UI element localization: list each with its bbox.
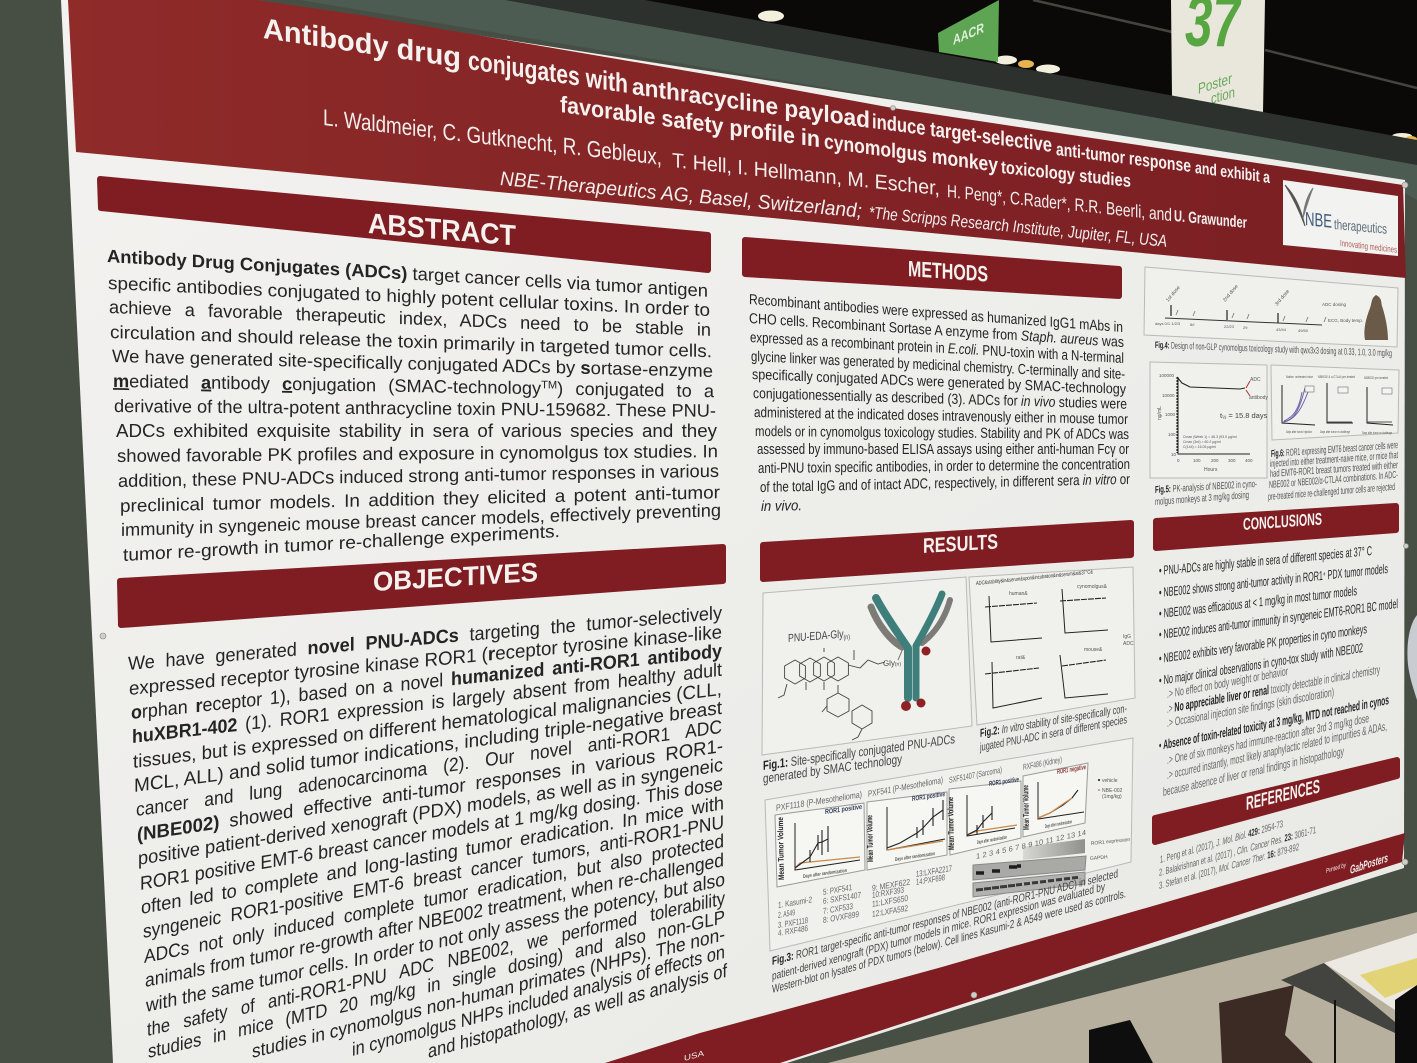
footer contact text: USA: [684, 1049, 705, 1063]
title: conjugates with: [468, 45, 628, 99]
abstract text: specific antibodies conjugated to highly potent cellular toxins. In order to: [108, 273, 710, 320]
figure 5: PK analysis chart: ng/mL: [1157, 406, 1163, 420]
sample list: 9: MEXF622: [872, 877, 910, 893]
abstract text: preclinical tumor models. In addition they elicited a potent anti-tumor: [120, 482, 720, 516]
heading bar: conclusions: [1156, 506, 1396, 548]
chart: naive mice: Days after tumor injection: [1286, 430, 1312, 434]
chart: PXF541: [865, 775, 947, 870]
timeline axis: [1165, 318, 1322, 325]
objectives text: tissues, but is expressed on different hematological malignancies (CLL,: [133, 679, 722, 773]
icon: monkey: [1364, 295, 1388, 340]
timeline day labels: days 0/1 1/2/3: [1155, 321, 1181, 326]
chart: SXF51407: ROR1 positive: [989, 777, 1019, 788]
figure 5: PK analysis chart: t: [1220, 411, 1222, 420]
legend: IgG ADC: IgG: [1123, 634, 1131, 640]
objectives text: with the same tumor cells. In order to not only assess the potency, but also: [145, 869, 725, 1017]
figure 4: study design timeline: [1144, 267, 1398, 347]
caption: figure 5: Fig.5: PK-analysis of NBE002 in cyno-: [1155, 479, 1257, 496]
methods text: specifically conjugated ADCs were generated by SMAC-technology: [752, 367, 1127, 398]
objectives text: the safety of anti-ROR1-PNU ADC NBE002, we performed tolerability: [147, 888, 725, 1041]
chart: SXF51407: Mean Tumor Volume: [946, 797, 956, 850]
panel: references: [1155, 760, 1397, 892]
abstract text: [107, 246, 721, 565]
figure 5: PK analysis chart: 100000: [1159, 373, 1175, 378]
abstract text: ADCs exhibited exquisite stability in sera of various species and they: [116, 421, 717, 441]
heading: objectives: OBJECTIVES: [373, 557, 538, 597]
sample list: 4. RXF486: [778, 923, 808, 938]
dose labels: 1st dose: [1165, 285, 1182, 303]
chart: mouse: mouse&: [1084, 647, 1103, 653]
title: Antibody drug: [263, 13, 461, 75]
objectives text: positive patient-derived xenograft (PDX) models, as well as in syngeneic: [138, 755, 723, 870]
timeline day labels: 49/50: [1298, 328, 1309, 333]
figure 6: rechallenge charts: [1271, 365, 1399, 440]
heading bar: methods: [745, 240, 1119, 296]
board top trim: [505, 0, 1417, 165]
title: anthracycline payload: [632, 74, 870, 134]
legend: vehicle and NBE-002: [1098, 778, 1123, 800]
abstract text: showed favorable PK profiles and exposure in cynomolgus tox studies. In: [117, 441, 718, 466]
figure 5: PK analysis chart: 1000: [1165, 412, 1176, 417]
abstract text: tumor re-growth in tumor re-challenge experiments.: [123, 521, 560, 565]
legend: vehicle and NBE-002: vehicle: [1102, 778, 1118, 784]
sample list: 5: PXF541: [823, 882, 852, 897]
objectives text: syngeneic ROR1-positive EMT-6 breast cancer tumors, anti-ROR1-PNU: [143, 812, 724, 943]
chart: rat: rat&: [1016, 655, 1026, 661]
panel: abstract: [100, 179, 721, 565]
chart: PXF541: PXF541 (P-Mesothelioma): [868, 775, 943, 799]
objectives text: and histopathology, as well as analysis of: [428, 960, 728, 1063]
abstract text: addition, these PNU-ADCs induced strong anti-tumor responses in various: [118, 461, 719, 491]
heading: abstract: ABSTRACT: [368, 208, 516, 253]
caption: figure 3: Fig.3: ROR1 target-specific anti-tumor responses of NBE002 (anti-ROR1-PNU ADC) in selected: [772, 867, 1118, 968]
chart: rat: [985, 655, 1042, 708]
chart: RXF486: RXF486 (Kidney): [1023, 754, 1062, 772]
dose labels: 3rd dose: [1274, 288, 1291, 307]
timeline legend: [1322, 302, 1363, 323]
label: PNU-EDA-Gly: (n): [843, 634, 850, 642]
banner: AACR: AACR: [953, 20, 984, 49]
printer credit: [1326, 851, 1388, 877]
figure 5: PK analysis chart: 10: [1171, 452, 1177, 457]
person at right edge: [1407, 615, 1417, 700]
sign: poster section 37: [1171, 0, 1265, 112]
dose labels: [1165, 284, 1291, 307]
sample list: 6: SXFS1407: [823, 890, 861, 906]
banner: AACR: [938, 0, 999, 62]
references list: 3. Stefan et al. (2017), Mol. Cancer Ther. 16: 879-892: [1159, 842, 1299, 892]
chart: PXF541: Days after randomization: [895, 851, 935, 863]
figure 5: PK analysis chart: Cmax (Week 1) = 46.3 (93.0 µg/ml: [1183, 435, 1237, 439]
methods text: Recombinant antibodies were expressed as humanized IgG1 mAbs in: [749, 292, 1123, 336]
authors: T. Hell, I. Hellmann, M. Escher,: [672, 149, 940, 200]
legend: vehicle and NBE-002: (1mg/kg): [1102, 794, 1122, 800]
western blot: ROR1 expression: [1091, 837, 1131, 847]
methods text: expressed as a recombinant protein in E.coli. PNU-toxin with a N-terminal: [750, 330, 1124, 367]
chart: PXF541: Mean Tumor Volume: [865, 815, 875, 862]
figure 1: PNU-ADC schematic: [762, 577, 972, 755]
chart: NBE002 plus CTLA4: Days after tumor re-challenge: [1320, 430, 1350, 434]
objectives text: We have generated novel PNU-ADCs targeting the tumor-selectively: [128, 603, 722, 675]
chart: RXF486: ROR1 negative: [1057, 764, 1086, 776]
figure 5: PK analysis chart: 100: [1168, 432, 1176, 437]
figure 5: PK analysis chart: [1150, 362, 1268, 478]
caption: figure 1: generated by SMAC technology: [763, 751, 902, 786]
heading bar: abstract: [100, 179, 708, 270]
printer credit: GabPosters: [1350, 851, 1388, 877]
legend: IgG ADC: ADC: [1123, 641, 1134, 647]
title: anti-tumor response: [1056, 139, 1191, 176]
figure 5: PK analysis chart: 10000: [1162, 393, 1175, 398]
affiliations: NBE-Therapeutics AG, Basel, Switzerland;: [500, 168, 862, 223]
sample list: 10:RXF393: [872, 885, 904, 900]
chart: cynomolgus: [1060, 584, 1108, 633]
methods text: of the total IgG and of intact ADC, respectively, in different sera in vitro or: [760, 472, 1130, 496]
objectives text: in cynomolgus NHPs included analysis of effects on: [352, 942, 725, 1061]
authors: H. Peng*, C.Rader*, R.R. Beerli, and: [947, 181, 1172, 225]
methods text: glycine linker was generated by medicinal chemistry. C-terminally and site-: [751, 349, 1125, 383]
figure 5: PK analysis chart: Cmax (3rd) = 60.2 µg/ml: [1183, 440, 1221, 444]
heading: results: RESULTS: [923, 531, 998, 558]
sample list: 14:PXF698: [916, 872, 945, 887]
printer credit: Printed by: [1326, 862, 1346, 875]
chart: PXF1118: PXF1118 (P-Mesothelioma): [776, 789, 862, 813]
methods text: [749, 292, 1130, 515]
authors: L. Waldmeier, C. Gutknecht, R. Gebleux,: [323, 104, 662, 170]
figure 5: PK analysis chart: 300: [1228, 458, 1236, 463]
title: favorable safety profile in: [560, 91, 820, 152]
chart: RXF486: Days after randomization: [1045, 819, 1072, 830]
caption: figure 3: Western-blot on lysates of PDX tumors (below). Cell lines Kasumi-2 & A549 were used as controls.: [772, 887, 1126, 996]
caption: figure 3: patient-derived xenograft (PDX) tumor models in mice. ROR1 expression was evaluated by: [772, 880, 1105, 983]
western blot: 1 2 3 4 5 6 7 8 9 10 11 12 13 14: [976, 828, 1086, 861]
objectives text: expressed receptor tyrosine kinase ROR1 (receptor tyrosine kinase-like: [129, 622, 722, 700]
objectives text: ROR1 positive EMT-6 breast cancer models at 1 mg/kg dosing. This dose: [140, 774, 723, 895]
caption: figure 2: Fig.2: In vitro stability of site-specifically con-: [980, 703, 1127, 740]
abstract text: derivative of the ultra-potent anthracycline toxin PNU-159682. These PNU-: [114, 396, 716, 421]
figure 6: rechallenge charts: Native: untreated mice: [1286, 375, 1313, 379]
panel: objectives: [120, 547, 728, 1063]
heading: references: REFERENCES: [1246, 776, 1320, 815]
objectives text: MCL, ALL) and solid tumor indications, including triple-negative breast: [134, 698, 723, 797]
sample list: [778, 863, 952, 938]
heading bar: objectives: [120, 547, 723, 625]
figure 2: serum stability charts: [969, 567, 1135, 725]
figure 6: rechallenge charts: NBE002 & α-CTLA4 pre-treated: [1318, 375, 1355, 379]
label: PNU-EDA-Gly: PNU-EDA-Gly: [788, 627, 861, 645]
heading bar: references: [1155, 760, 1397, 842]
body temperature ticks: [1176, 310, 1326, 322]
abstract text: mediated antibody conjugation (SMAC-technology: [113, 371, 538, 398]
caption: figure 2: jugated PNU-ADC in sera of different species: [979, 713, 1127, 754]
title: [263, 13, 1271, 191]
ceiling: [500, 0, 1417, 165]
sample list: 3. PXF1118: [778, 915, 808, 930]
authors: U. Grawunder: [1174, 207, 1247, 232]
title: and exhibit a: [1195, 158, 1271, 187]
chart: SXF51407: [946, 764, 1021, 855]
heading: methods: METHODS: [908, 256, 988, 287]
chart: human: human&: [1009, 591, 1028, 597]
sign: poster section 37: ction: [1211, 84, 1235, 108]
abstract text: We have generated site-specifically conjugated ADCs by sortase-enzyme: [112, 346, 713, 381]
chart: RXF486: [1021, 754, 1088, 837]
chart: SXF51407: SXF51407 (Sarcoma): [949, 764, 1002, 785]
timeline day labels: 43/44: [1276, 327, 1287, 332]
panel: results: [762, 523, 1135, 996]
sample list: 13:LXFA2217: [916, 863, 952, 879]
western blot: GAPDH: [1090, 854, 1108, 862]
floor and furniture: [828, 912, 1417, 1063]
references list: 2. Balakrishnan et al. (2017) , Clin. Cancer Res. 23: 3061-71: [1159, 825, 1316, 879]
logo: NBE therapeutics: NBE: [1305, 209, 1332, 233]
abstract text: ) conjugated to a: [557, 379, 715, 401]
timeline legend: ECG, Body temp.: [1328, 318, 1363, 323]
objectives text: cancer and lung adenocarcinoma (2). Our novel anti-ROR1 ADC: [136, 717, 722, 821]
panel: methods: [745, 240, 1130, 515]
panel: conclusions: [1156, 506, 1398, 799]
chart: PXF1118: Days after randomization: [803, 868, 847, 880]
figure 5: PK analysis chart: 100: [1193, 458, 1201, 463]
methods text: assessed by immuno-based ELISA assays using either anti-human Fcγ or: [757, 442, 1129, 458]
conclusions list: +: [1323, 570, 1326, 579]
objectives text: studies in mice (MTD 20 mg/kg in single dosing) and also non-GLP: [148, 907, 725, 1063]
dose arrows: [1171, 305, 1278, 323]
affiliations: [500, 168, 1167, 251]
objectives text: (NBE002) showed effective anti-tumor responses in various ROR1-: [137, 736, 723, 846]
chart: PXF541: ROR1 positive: [912, 791, 945, 803]
title: cynomolgus monkey: [824, 130, 998, 177]
molecule: [778, 648, 885, 740]
chart: PXF1118: ROR1 positive: [825, 804, 862, 816]
chart: cynomolgus: cynomolgus&: [1077, 584, 1108, 590]
methods text: in vivo.: [761, 498, 802, 515]
poster pins: [100, 106, 1408, 998]
caption: figure 2: [979, 703, 1127, 754]
chart: PXF1118: Mean Tumor Volume: [776, 817, 786, 880]
chart: human: [985, 591, 1042, 642]
abstract text: achieve a favorable therapeutic index, ADCs need to be stable in: [109, 297, 711, 340]
sample list: 2. A549: [778, 907, 795, 920]
abstract text: Antibody Drug Conjugates (ADCs) target cancer cells via tumor antigen: [107, 246, 708, 301]
figure 5: PK analysis chart: 0: [1177, 458, 1180, 463]
chart: RXF486: Mean Tumor Volume: [1021, 785, 1031, 830]
abstract text: immunity in syngeneic mouse breast cancer models, effectively preventing: [121, 500, 721, 540]
chart: SXF51407: Days after randomization: [977, 835, 1007, 846]
objectives text: animals from tumor re-growth after NBE002 treatment, when re-challenged: [145, 850, 724, 992]
timeline day labels: 29: [1243, 325, 1248, 330]
dose labels: 2nd dose: [1222, 284, 1240, 303]
abstract text: circulation and should release the toxin primarily in targeted tumor cells.: [110, 322, 712, 361]
title: induce target-selective: [872, 110, 1052, 157]
footer band: [605, 833, 1405, 1063]
sample list: 12:LXFA592: [872, 903, 908, 919]
figure 5: PK analysis chart: C(144) = 16.05 µg/ml: [1183, 445, 1216, 449]
figure 3: tumor response charts: [765, 738, 1133, 951]
methods text: CHO cells. Recombinant Sortase A enzyme from Staph. aureus was: [749, 311, 1124, 351]
timeline day labels: 8/I: [1190, 322, 1194, 327]
methods text: models or in cynomolgus toxicology studies. Stability and PK of ADCs was: [755, 424, 1129, 443]
antibody: [871, 594, 950, 711]
chart: NBE002: Days after tumor re-challenge: [1362, 431, 1392, 435]
legend: vehicle and NBE-002: NBE-002: [1102, 788, 1123, 794]
figure 5: PK analysis chart: antibody: [1249, 395, 1268, 401]
caption: figure 5: [1155, 479, 1257, 508]
logo: NBE therapeutics: therapeutics: [1334, 216, 1387, 237]
timeline day labels: 22/23: [1224, 324, 1235, 329]
affiliations: *The Scripps Research Institute, Jupiter, FL, USA: [869, 203, 1167, 251]
figure 5: PK analysis chart: Hours: [1204, 467, 1218, 473]
caption: figure 1: Fig.1: Site-specifically conjugated PNU-ADCs: [763, 731, 955, 773]
header band: [68, 0, 1406, 278]
methods text: administered at the indicated doses intravenously either in mouse tumor: [754, 405, 1128, 428]
figure 5: PK analysis chart: ½: [1222, 414, 1227, 421]
sign: poster section 37: Poster: [1198, 70, 1232, 98]
sample list: 7: CXF533: [823, 901, 853, 916]
methods text: anti-PNU toxin specific antibodies, in order to determine the concentration: [758, 457, 1130, 477]
figure 6: rechallenge charts: NBE002 pre-treated: [1364, 376, 1388, 380]
caption: figure 5: molgus monkeys at 3 mg/kg dosing: [1155, 490, 1249, 508]
chart: PXF1118: [775, 789, 865, 887]
caption: figure 3: [772, 867, 1126, 996]
timeline day labels: [1155, 321, 1309, 333]
methods text: conjugationessentially as described (3). ADCs for in vivo studies were: [753, 386, 1127, 413]
figure 2 title: ADC&stability&in&serum&upon&incubation&in&serum&at&37°C&: [976, 569, 1093, 587]
abstract text: TM: [541, 379, 557, 392]
timeline legend: ADC dosing: [1322, 302, 1347, 307]
figure 5: PK analysis chart: = 15.8 days: [1226, 411, 1268, 420]
figure 5: PK analysis chart: ADC: [1250, 377, 1261, 383]
caption: figure 6: [1268, 440, 1398, 503]
title: toxicology studies: [1001, 157, 1131, 191]
figure 5: PK analysis chart: 400: [1245, 458, 1253, 463]
conclusions list: [1159, 543, 1398, 799]
sample list: 8: OVXF899: [823, 909, 859, 925]
heading: conclusions: CONCLUSIONS: [1243, 509, 1322, 534]
sample list: 11:LXFS650: [872, 893, 908, 909]
objectives text: ADCs not only induced complete tumor eradication, but also protected: [144, 831, 724, 968]
objectives text: [128, 603, 728, 1063]
objectives text: huXBR1-402 (1). ROR1 expression is largely absent from healthy adult: [132, 660, 723, 748]
chart: mouse: [1060, 647, 1108, 698]
legend: IgG ADC: [1123, 634, 1134, 647]
objectives text: often led to complete and long-lasting tumor eradication. In mice with: [141, 793, 724, 919]
heading bar: results: [763, 523, 1131, 579]
label: Gly linker: Gly(n): [883, 658, 901, 668]
objectives text: orphan receptor 1), based on a novel humanized anti-ROR1 antibody: [131, 641, 722, 724]
objectives text: studies in cynomolgus non-human primates (NHPs). The non-: [252, 924, 725, 1063]
western blot: [973, 828, 1131, 897]
conclusions list: .> No effect on body weight or behavior: [1167, 664, 1288, 701]
logo: NBE therapeutics: [1283, 180, 1398, 256]
figure 5: PK analysis chart: 200: [1211, 458, 1219, 463]
authors: [323, 104, 1247, 232]
references list: 1. Peng et al. (2017), J. Mol. Biol. 429: 2954-73: [1160, 819, 1283, 866]
sample list: 1. Kasumi-2: [778, 894, 812, 910]
board upper band: [300, 0, 1417, 200]
